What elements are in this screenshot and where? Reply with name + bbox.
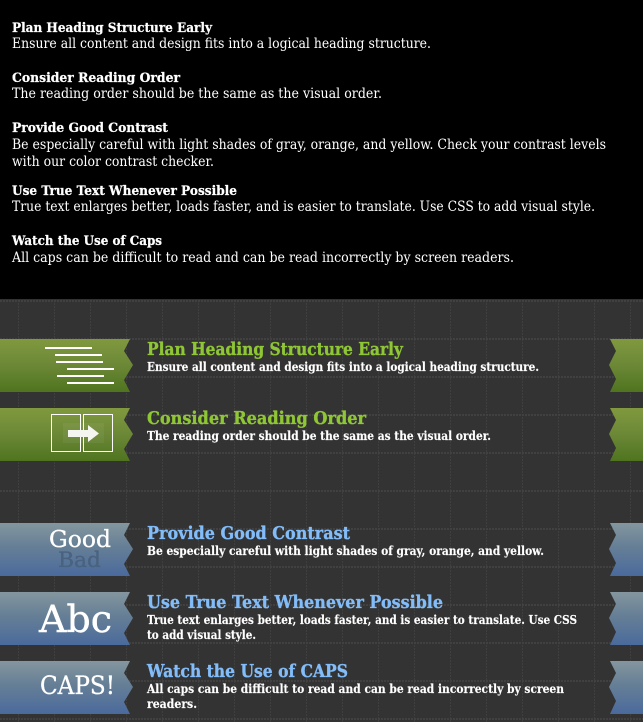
icon: CAPS word: CAPS! — [40, 671, 115, 700]
right green ribbon — [609, 339, 643, 392]
heading: Provide Good Contrast — [147, 523, 351, 544]
icon: good and bad contrast words: Bad — [58, 548, 101, 572]
tip 5 text: Watch the Use of Caps — [11, 234, 162, 249]
icon: good and bad contrast words — [49, 527, 111, 572]
tip 4 text — [12, 184, 595, 215]
tip 1 text — [12, 21, 431, 52]
left blue ribbon — [0, 592, 133, 645]
left green ribbon — [0, 408, 133, 461]
row 3: provide good contrast — [0, 523, 643, 576]
description — [147, 613, 577, 642]
heading: Plan Heading Structure Early — [147, 339, 403, 360]
tip 3 text: with our color contrast checker. — [12, 154, 214, 170]
tip 3 text — [12, 121, 606, 170]
description: Be especially careful with light shades of gray, orange, and yellow. — [147, 544, 544, 558]
icon: two boxes with arrow — [52, 414, 112, 452]
left blue ribbon — [0, 661, 133, 714]
left blue ribbon — [0, 523, 133, 576]
left green ribbon — [0, 339, 133, 392]
right blue ribbon — [609, 592, 643, 645]
icon: good and bad contrast words: Good — [49, 527, 111, 553]
row 1: plan heading structure — [0, 339, 643, 392]
heading: Watch the Use of CAPS — [146, 661, 348, 682]
tip 2 text — [12, 71, 382, 102]
row 5: watch the use of caps — [0, 661, 643, 714]
description: to add visual style. — [147, 628, 256, 642]
tip 1 text: Ensure all content and design fits into a logical heading structure. — [12, 36, 431, 52]
bottom panel: dark grid background — [0, 299, 643, 722]
right blue ribbon — [609, 523, 643, 576]
description: Ensure all content and design fits into a logical heading structure. — [147, 360, 539, 374]
right green ribbon — [609, 408, 643, 461]
tip 1 text: Plan Heading Structure Early — [12, 21, 212, 36]
right blue ribbon — [609, 661, 643, 714]
description — [146, 682, 564, 711]
tip 4 text: Use True Text Whenever Possible — [12, 184, 237, 199]
heading: Use True Text Whenever Possible — [147, 592, 443, 613]
heading: Consider Reading Order — [147, 408, 366, 429]
top panel: black text list — [0, 0, 643, 299]
description: readers. — [147, 697, 197, 711]
row 2: consider reading order — [0, 408, 643, 461]
icon: heading lines — [45, 347, 114, 384]
description: All caps can be difficult to read and can be read incorrectly by screen — [146, 682, 564, 696]
row 4: use true text — [0, 592, 643, 645]
tip 3 text: Be especially careful with light shades of gray, orange, and yellow. Check your contrast levels — [12, 137, 606, 153]
description: True text enlarges better, loads faster, and is easier to translate. Use CSS — [147, 613, 577, 627]
tip 2 text: The reading order should be the same as the visual order. — [12, 86, 382, 102]
tip 5 text — [11, 234, 514, 266]
tip 3 text: Provide Good Contrast — [12, 121, 168, 136]
tip 2 text: Consider Reading Order — [12, 71, 180, 86]
icon: Abc word: Abc — [38, 598, 112, 641]
description: The reading order should be the same as the visual order. — [147, 429, 491, 443]
tip 5 text: All caps can be difficult to read and can be read incorrectly by screen readers. — [11, 250, 514, 266]
tip 4 text: True text enlarges better, loads faster, and is easier to translate. Use CSS to add visual style. — [12, 199, 595, 215]
